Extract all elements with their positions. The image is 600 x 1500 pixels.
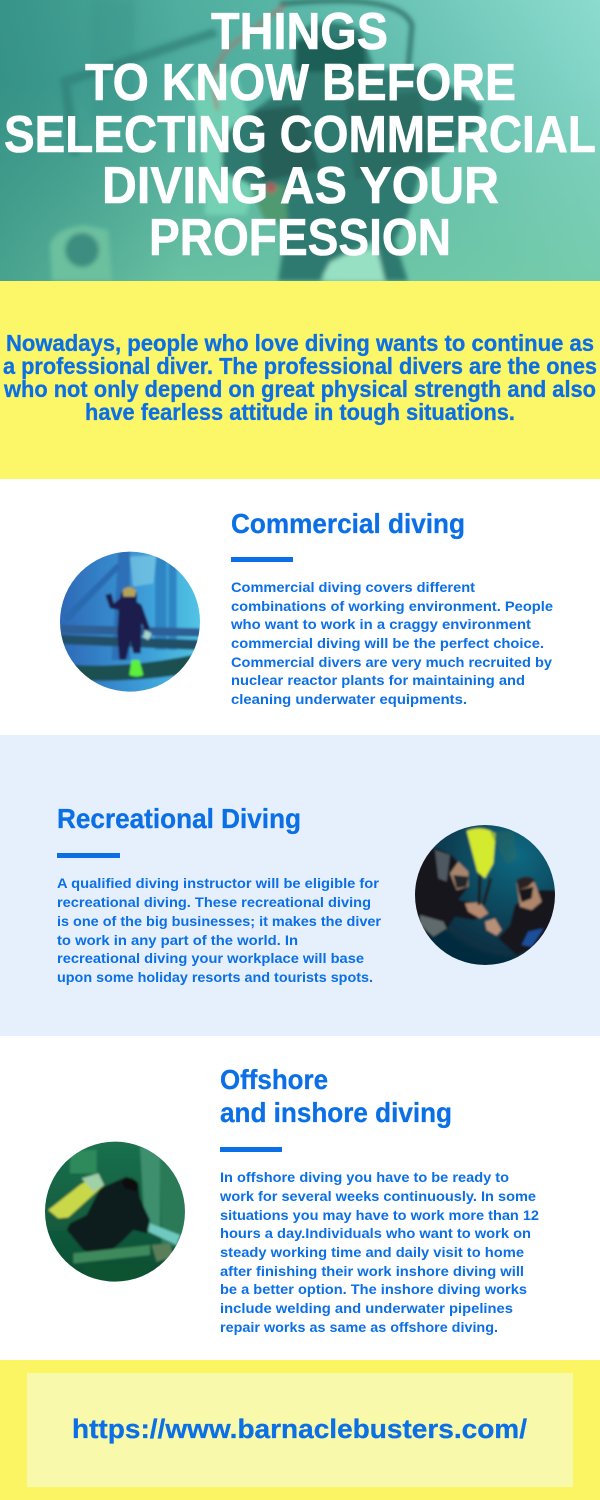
text block: commercial diving: Commercial diving covers different xyxy=(231,579,475,595)
intro text xyxy=(3,330,597,425)
text block: offshore and inshore diving: after finishing their work inshore diving will xyxy=(220,1263,524,1279)
title xyxy=(4,3,596,267)
panel: hero background photo of diver xyxy=(0,0,600,281)
heading: recreational diving: Recreational Diving xyxy=(57,803,301,834)
text block: offshore and inshore diving: be a better option. The inshore diving works xyxy=(220,1281,527,1297)
text block: offshore and inshore diving: situations you may have to work more than 12 xyxy=(220,1207,539,1223)
text block: recreational diving: recreational diving your workplace will base xyxy=(57,950,364,966)
text block: recreational diving: to work in any part of the world. In xyxy=(57,932,298,948)
text block: commercial diving: cleaning underwater equipments. xyxy=(231,691,467,707)
text block: offshore and inshore diving: hours a day.Individuals who want to work on xyxy=(220,1225,531,1241)
text block: recreational diving: is one of the big businesses; it makes the diver xyxy=(57,913,382,929)
text block: commercial diving: commercial diving will be the perfect choice. xyxy=(231,635,544,651)
title: PROFESSION xyxy=(149,209,451,267)
icon: offshore diver photo xyxy=(45,1142,185,1282)
text block: commercial diving: who want to work in a craggy environment xyxy=(230,616,531,632)
heading: offshore and inshore diving: and inshore diving xyxy=(220,1097,452,1128)
heading: offshore and inshore diving xyxy=(220,1064,452,1128)
title: TO KNOW BEFORE xyxy=(85,54,516,112)
text block: offshore and inshore diving: steady working time and daily visit to home xyxy=(220,1244,524,1260)
footer url: https://www.barnaclebusters.com/ xyxy=(72,1414,528,1444)
footer inner box xyxy=(27,1373,573,1487)
text block: commercial diving: combinations of working environment. People xyxy=(231,598,553,614)
text block: recreational diving xyxy=(57,875,382,985)
text block: commercial diving: Commercial divers are very much recruited by xyxy=(231,654,552,670)
divider bar xyxy=(220,1147,282,1152)
text block: offshore and inshore diving: repair works as same as offshore diving. xyxy=(220,1319,498,1335)
panel: intro background xyxy=(0,281,600,479)
divider bar xyxy=(57,853,120,858)
icon: commercial diver photo xyxy=(60,552,200,692)
intro text: have fearless attitude in tough situations. xyxy=(85,399,515,425)
heading: commercial diving: Commercial diving xyxy=(231,508,465,539)
title: DIVING AS YOUR xyxy=(102,157,499,215)
text block: offshore and inshore diving: In offshore diving you have to be ready to xyxy=(220,1169,509,1185)
text block: offshore and inshore diving: work for several weeks continuously. In some xyxy=(219,1188,536,1204)
text block: offshore and inshore diving xyxy=(219,1169,539,1335)
panel: offshore and inshore diving xyxy=(45,1068,538,1335)
text block: recreational diving: upon some holiday resorts and tourists spots. xyxy=(57,969,373,985)
heading: offshore and inshore diving: Offshore xyxy=(220,1064,328,1095)
text block: offshore and inshore diving: include welding and underwater pipelines xyxy=(220,1300,513,1316)
text block: recreational diving: recreational diving. These recreational diving xyxy=(57,894,371,910)
panel: footer xyxy=(0,1360,600,1500)
divider bar xyxy=(231,557,293,562)
panel: commercial diving xyxy=(60,512,552,707)
text block: recreational diving: A qualified diving instructor will be eligible for xyxy=(57,875,380,891)
icon: two divers photo xyxy=(415,825,555,965)
title: THINGS xyxy=(211,3,388,61)
text block: commercial diving: nuclear reactor plants for maintaining and xyxy=(231,672,525,688)
panel: recreational diving xyxy=(0,735,600,1036)
text block: commercial diving xyxy=(230,579,553,707)
